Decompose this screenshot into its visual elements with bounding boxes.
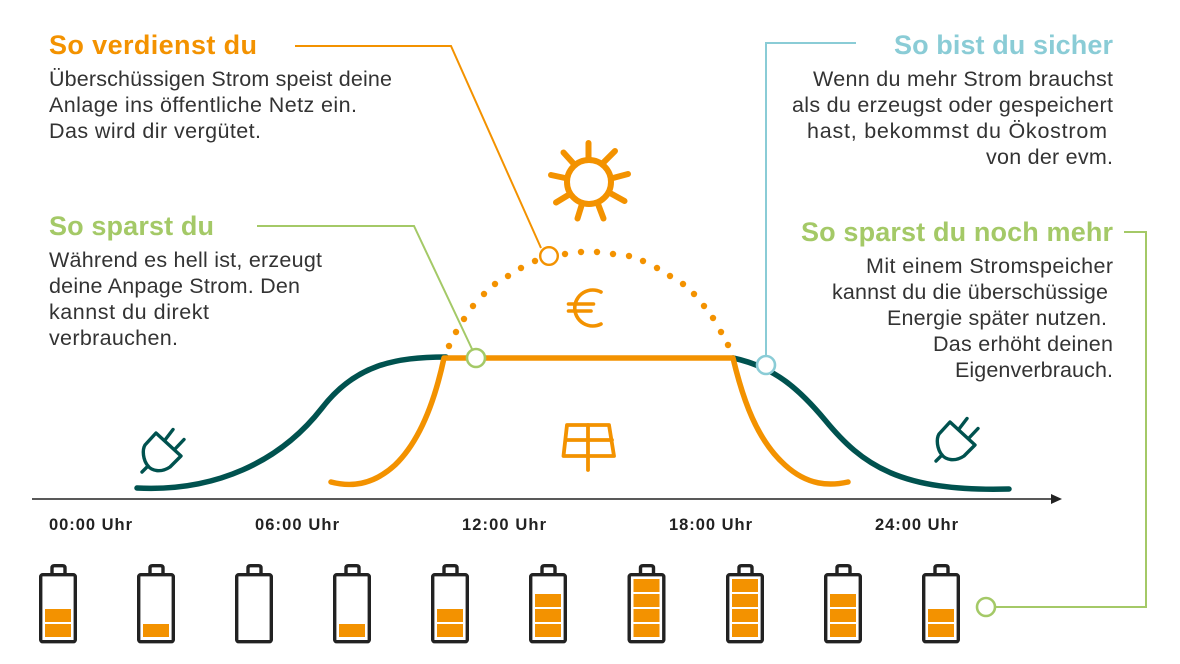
heading: so sparst du noch mehr: So sparst du noch mehr: [801, 217, 1113, 247]
heading: so bist du sicher: So bist du sicher: [894, 30, 1113, 60]
time labels: [49, 516, 959, 534]
text block: so verdienst du: [49, 67, 392, 143]
text block: so sparst du noch mehr: Energie später nutzen.: [887, 306, 1107, 330]
panel: so verdienst du: [49, 30, 392, 143]
battery 18:40: [728, 566, 762, 642]
heading: so sparst du: So sparst du: [49, 211, 214, 241]
icon: solar panel: [564, 425, 614, 470]
text block: so sparst du: [49, 248, 322, 350]
text block: so sparst du: deine Anpage Strom. Den: [49, 274, 300, 298]
battery 21:20: [826, 566, 860, 642]
text block: so bist du sicher: von der evm.: [986, 145, 1113, 169]
text block: so sparst du noch mehr: kannst du die überschüssige: [832, 280, 1108, 304]
battery 16:00: [629, 566, 664, 642]
battery empty: [237, 566, 271, 642]
icon: sun: [551, 143, 628, 218]
icon: plug right: [936, 418, 978, 461]
curve: solar production: [331, 358, 848, 485]
battery row: [41, 566, 958, 642]
text block: so verdienst du: Überschüssigen Strom speist deine: [49, 67, 392, 91]
text block: so bist du sicher: Wenn du mehr Strom brauchst: [813, 67, 1113, 91]
icon: plug left: [142, 430, 184, 472]
text block: so sparst du noch mehr: [832, 254, 1113, 382]
text block: so sparst du: kannst du direkt: [49, 300, 209, 324]
text block: so sparst du noch mehr: Das erhöht deinen: [933, 332, 1113, 356]
battery 10:40: [433, 566, 467, 642]
connector: so verdienst du: [295, 46, 558, 265]
text block: so verdienst du: Das wird dir vergütet.: [49, 119, 261, 143]
connector: so sparst du noch mehr: [977, 232, 1146, 616]
time labels: 24:00 Uhr: [875, 516, 959, 534]
connector: so bist du sicher: [757, 43, 856, 374]
text block: so sparst du noch mehr: Eigenverbrauch.: [955, 358, 1113, 382]
text block: so bist du sicher: [792, 67, 1113, 169]
battery 13:20: [531, 566, 565, 642]
text block: so sparst du: Während es hell ist, erzeugt: [49, 248, 322, 272]
text block: so verdienst du: Anlage ins öffentliche Netz ein.: [49, 93, 357, 117]
time axis: [32, 494, 1062, 504]
battery 24:00: [924, 566, 958, 642]
panel: so sparst du noch mehr: [801, 217, 1113, 382]
icon: euro: [568, 290, 601, 326]
curve: grid power: [137, 357, 1009, 489]
text block: so sparst du noch mehr: Mit einem Stromspeicher: [866, 254, 1113, 278]
time labels: 00:00 Uhr: [49, 516, 133, 534]
battery 08:00: [335, 566, 369, 642]
panel: so sparst du: [49, 211, 322, 350]
time labels: 18:00 Uhr: [669, 516, 753, 534]
battery 02:40: [139, 566, 173, 642]
battery 00:00: [41, 566, 75, 642]
time labels: 06:00 Uhr: [255, 516, 340, 534]
text block: so bist du sicher: hast, bekommst du Ökostrom: [807, 119, 1107, 143]
dotted arc: feed-in: [446, 249, 731, 349]
panel: so bist du sicher: [792, 30, 1113, 169]
text block: so sparst du: verbrauchen.: [49, 326, 178, 350]
time labels: 12:00 Uhr: [462, 516, 547, 534]
heading: so verdienst du: So verdienst du: [49, 30, 257, 60]
text block: so bist du sicher: als du erzeugst oder gespeichert: [792, 93, 1113, 117]
connector: so sparst du: [257, 226, 485, 367]
